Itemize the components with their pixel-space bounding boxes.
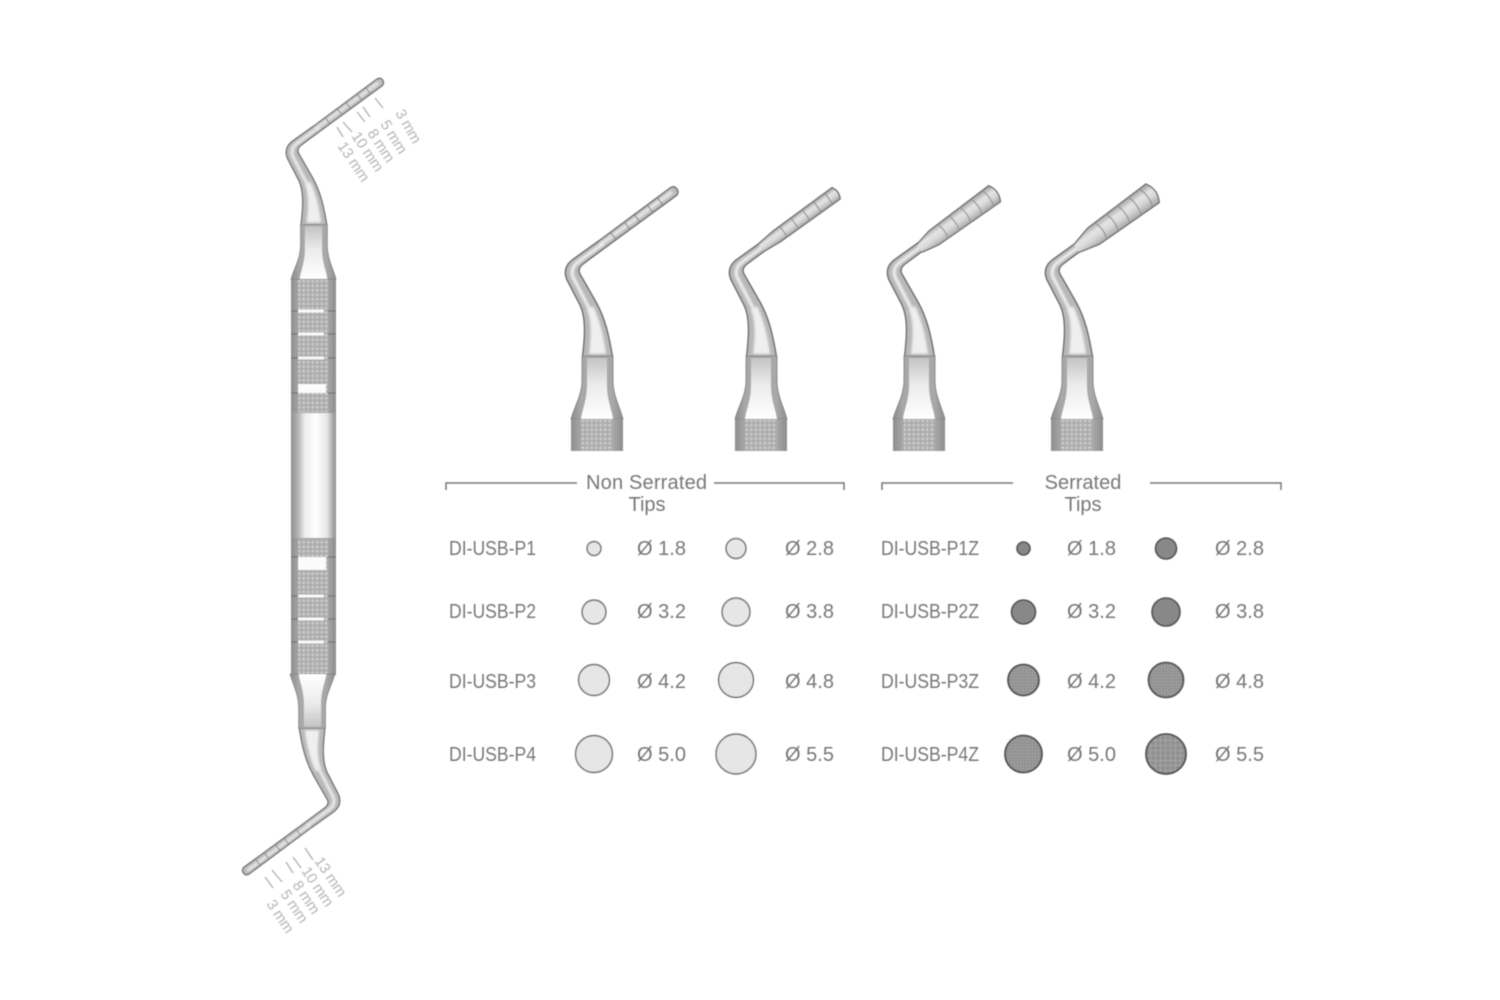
tip: DI-USB-P3 illustration [887,184,1003,451]
lower depth marks: 13 mm [311,854,350,900]
heading: serrated tips [882,472,1281,516]
row: DI-USB-P1Z [881,538,1264,560]
row: DI-USB-P4 [449,734,834,774]
lower working end [242,674,340,875]
row: DI-USB-P3Z: DI-USB-P3Z [881,671,979,693]
upper depth marks: 5 mm [377,117,410,157]
lower depth marks: 10 mm [298,864,337,910]
row: DI-USB-P1Z: Ø 2.8 [1215,538,1264,560]
full instrument [242,78,424,936]
row: DI-USB-P4: Ø 5.5 [785,744,834,766]
row: DI-USB-P4Z: Ø 5.0 [1067,744,1116,766]
row: DI-USB-P1: Ø 1.8 [637,538,686,560]
lower depth marks [263,848,350,936]
row: DI-USB-P4Z: DI-USB-P4Z [881,744,979,766]
row: DI-USB-P2Z: DI-USB-P2Z [881,601,979,623]
row: DI-USB-P3: Ø 4.8 [785,671,834,693]
tip: DI-USB-P4 illustration [1045,182,1162,451]
heading: non serrated tips: Tips [628,494,666,516]
handle [291,278,336,675]
row: DI-USB-P1Z: DI-USB-P1Z [881,538,979,560]
row: DI-USB-P1 [449,538,834,560]
upper depth marks: 10 mm [348,129,387,175]
row: DI-USB-P3 [449,662,834,698]
row: DI-USB-P3Z: Ø 4.8 [1215,671,1264,693]
row: DI-USB-P2: DI-USB-P2 [449,601,536,623]
upper working end [286,78,384,279]
heading: non serrated tips [446,472,844,516]
lower depth marks: 5 mm [277,887,311,926]
row: DI-USB-P2Z: Ø 3.8 [1215,601,1264,623]
row: DI-USB-P4Z [881,734,1264,774]
row: DI-USB-P2: Ø 3.2 [637,601,686,623]
tip: DI-USB-P2 illustration [729,186,842,451]
row: DI-USB-P2 [449,598,834,626]
row: DI-USB-P3: Ø 4.2 [637,671,686,693]
lower depth marks: 3 mm [263,897,297,936]
row: DI-USB-P3Z [881,662,1264,698]
lower depth marks: 8 mm [289,878,323,917]
upper depth marks [334,98,424,185]
heading: non serrated tips: Non Serrated [586,472,707,494]
row: DI-USB-P4Z: Ø 5.5 [1215,744,1264,766]
row: DI-USB-P3Z: Ø 4.2 [1067,671,1116,693]
row: DI-USB-P4: DI-USB-P4 [449,744,536,766]
heading: serrated tips: Tips [1064,494,1102,516]
upper depth marks: 13 mm [334,139,373,185]
tip: DI-USB-P1 illustration [565,187,678,451]
row: DI-USB-P3: DI-USB-P3 [449,671,536,693]
row: DI-USB-P1: DI-USB-P1 [449,538,536,560]
upper depth marks: 3 mm [392,106,424,146]
row: DI-USB-P2Z: Ø 3.2 [1067,601,1116,623]
upper depth marks: 8 mm [364,126,398,166]
row: DI-USB-P2Z [881,598,1264,626]
row: DI-USB-P4: Ø 5.0 [637,744,686,766]
row: DI-USB-P1Z: Ø 1.8 [1067,538,1116,560]
row: DI-USB-P1: Ø 2.8 [785,538,834,560]
heading: serrated tips: Serrated [1045,472,1121,494]
row: DI-USB-P2: Ø 3.8 [785,601,834,623]
